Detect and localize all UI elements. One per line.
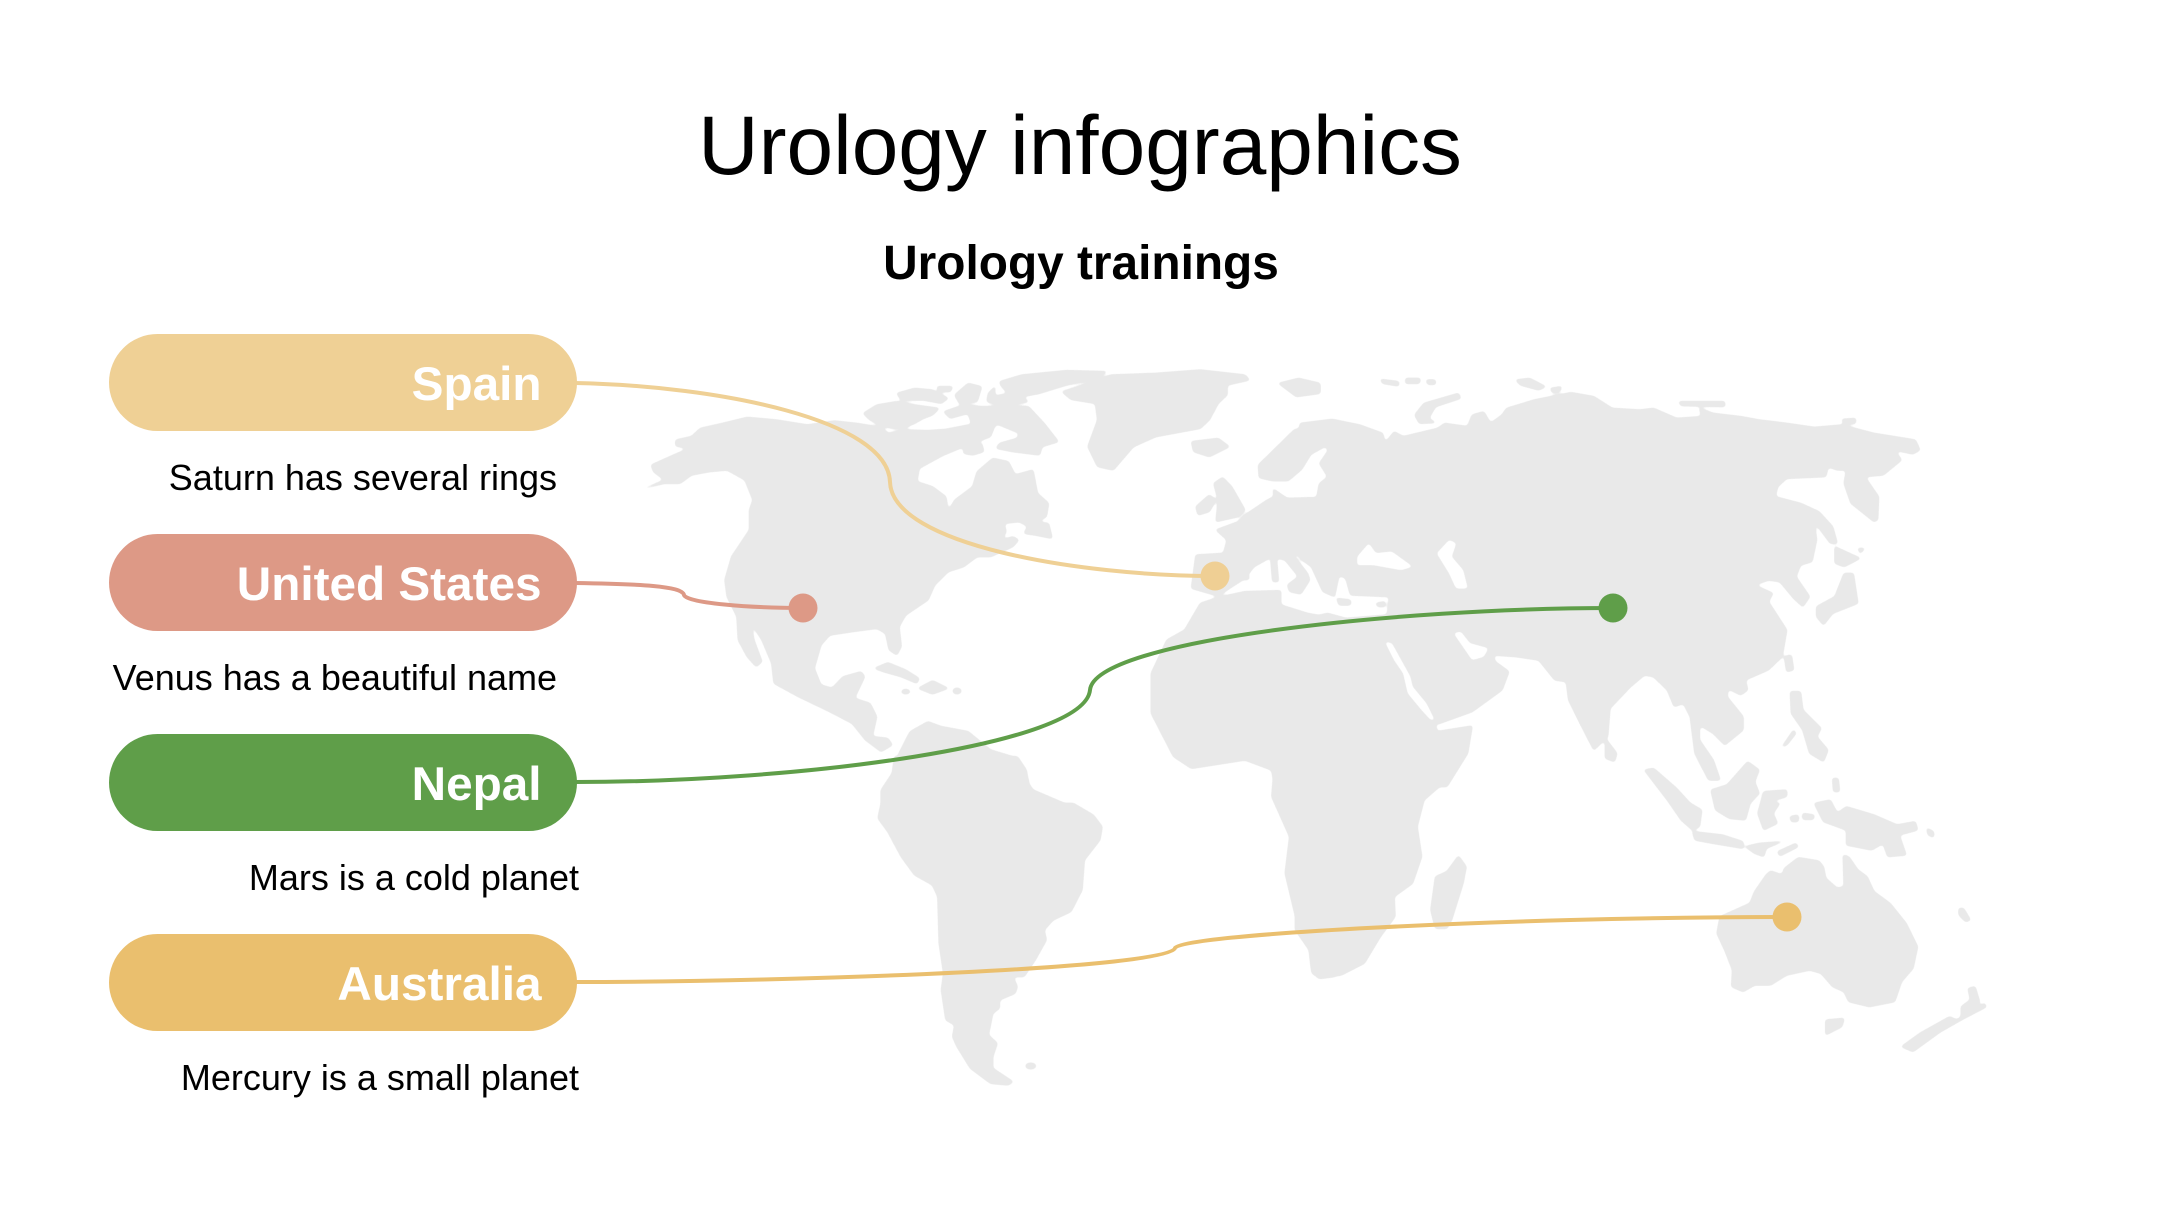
label: United States: United States — [237, 558, 542, 611]
description: Spain: Saturn has several rings — [169, 457, 557, 498]
map: southeast quadrant — [1295, 757, 1986, 1052]
world map — [620, 340, 2020, 1120]
description: Australia: Mercury is a small planet — [181, 1057, 579, 1098]
map: northwest quadrant — [645, 370, 1330, 787]
connector: United States — [575, 583, 818, 622]
marker: Nepal — [1598, 594, 1628, 622]
title: Urology infographics — [698, 98, 1462, 192]
marker: Spain — [1200, 562, 1230, 590]
map: northeast quadrant — [1256, 378, 1920, 787]
panel: Spain — [109, 334, 577, 498]
map: inland seas — [1256, 447, 1488, 720]
pill: Nepal — [109, 734, 577, 831]
panel: Australia — [109, 934, 579, 1098]
description: Nepal: Mars is a cold planet — [249, 857, 579, 898]
pill: United States — [109, 534, 577, 631]
label: Australia: Australia — [337, 958, 542, 1011]
pill: Australia — [109, 934, 577, 1031]
panel: Nepal — [109, 734, 579, 898]
description: United States: Venus has a beautiful name — [113, 657, 557, 698]
label: Spain: Spain — [412, 358, 542, 411]
panel: United States — [109, 534, 577, 698]
pill: Spain — [109, 334, 577, 431]
marker: Australia — [1772, 902, 1802, 932]
connector: Australia — [575, 902, 1802, 982]
subtitle: Urology trainings — [883, 237, 1279, 290]
connector: Nepal — [575, 594, 1628, 782]
connector: Spain — [575, 383, 1230, 590]
label: Nepal: Nepal — [412, 758, 542, 811]
map: southwest quadrant — [878, 757, 1334, 1085]
marker: United States — [788, 594, 818, 622]
